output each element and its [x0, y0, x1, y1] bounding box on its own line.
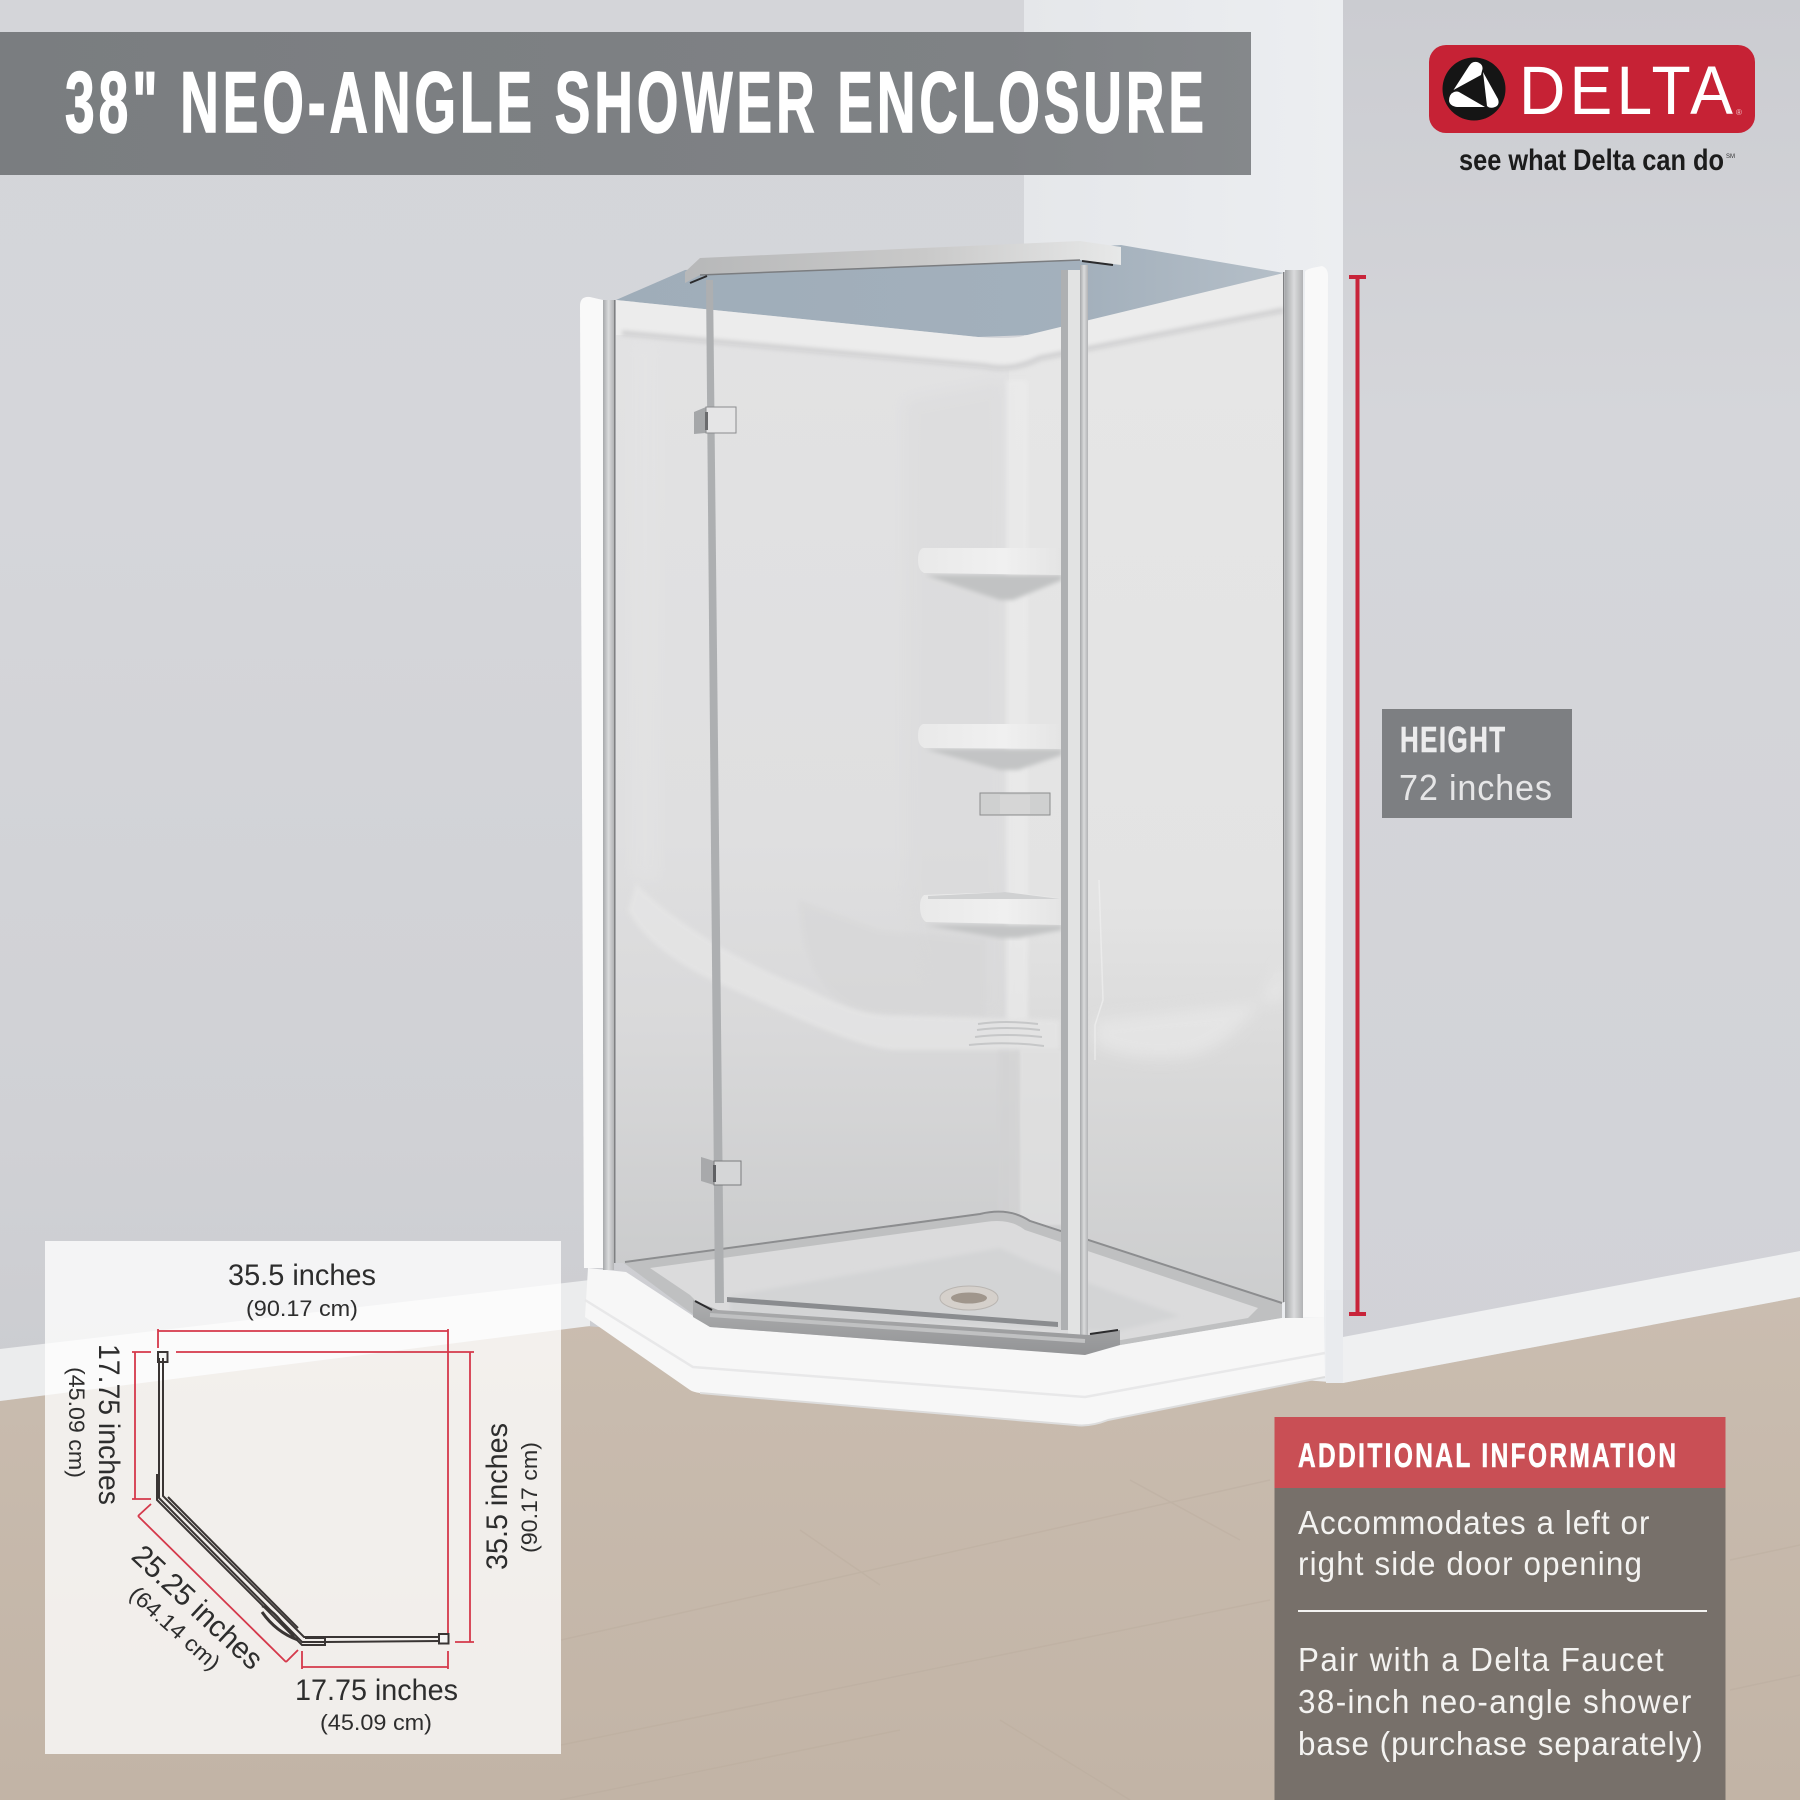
shower tray [624, 1213, 1282, 1345]
dimension label top: (90.17 cm) [246, 1296, 358, 1321]
right white wall flange [1300, 266, 1328, 1317]
text: pairing: base (purchase separately) [1298, 1725, 1703, 1762]
enclosure plan outline [157, 1352, 448, 1645]
height dimension line [1349, 277, 1366, 1314]
dimension label diagonal: 25.25 inches [125, 1539, 269, 1676]
height callout [1382, 709, 1572, 818]
shelf 2 [918, 724, 1062, 770]
top lip of wall [616, 273, 1284, 370]
text: door opening: right side door opening [1298, 1545, 1642, 1582]
text: pairing: Pair with a Delta Faucet [1298, 1641, 1664, 1678]
top header bar [685, 241, 1121, 283]
shelf 3 [920, 892, 1062, 938]
door hinge edge post [706, 280, 724, 1303]
lower door hinge [701, 1157, 741, 1185]
dimension label left: (45.09 cm) [64, 1367, 89, 1478]
right wall track [1283, 270, 1303, 1318]
right wall panel [1009, 305, 1284, 1303]
baseboards [0, 1251, 1800, 1401]
drain [940, 1286, 998, 1310]
shower enclosure [580, 241, 1328, 1425]
back opening: blue-grey ceiling [616, 245, 1284, 337]
panel: additional information [1274, 1417, 1726, 1800]
door bottom sweep [727, 1297, 1058, 1327]
panel: floor plan dimensions [45, 1241, 561, 1754]
heading: ADDITIONAL INFORMATION [1298, 1437, 1676, 1475]
dimension label top: 35.5 inches [228, 1259, 376, 1292]
dimension label left [64, 1344, 125, 1505]
Delta logo: see what Delta can do [1459, 144, 1724, 177]
dimension label left: 17.75 inches [92, 1344, 125, 1505]
threshold bar [693, 1300, 1120, 1355]
dimension label right: (90.17 cm) [517, 1442, 542, 1553]
text: pairing: 38-inch neo-angle shower [1298, 1683, 1692, 1720]
text: door opening: Accommodates a left or [1298, 1504, 1650, 1541]
dimension label right: 35.5 inches [481, 1423, 514, 1570]
height callout: HEIGHT [1400, 720, 1505, 760]
dimension lines [132, 1329, 474, 1669]
dimension label bottom: (45.09 cm) [320, 1710, 432, 1735]
soap dish [980, 793, 1050, 815]
upper door hinge [694, 407, 736, 434]
Delta logo: SM [1726, 154, 1735, 160]
title banner [0, 32, 1251, 175]
dimension label top [228, 1259, 376, 1321]
height callout: 72 inches [1399, 768, 1552, 808]
left wall panel [616, 320, 1009, 1263]
moulded wall contours [628, 340, 1284, 1225]
title banner: 38" NEO-ANGLE SHOWER ENCLOSURE [65, 55, 1204, 151]
text: pairing [1298, 1641, 1703, 1762]
left wall track [603, 300, 616, 1270]
door centre posts [1061, 265, 1088, 1340]
text: door opening [1298, 1504, 1650, 1582]
white base [585, 1268, 1325, 1425]
shelf 1 [918, 548, 1062, 600]
seat ridges [969, 1022, 1044, 1046]
Delta logo [1429, 45, 1755, 177]
icon: delta triangle petals [1449, 62, 1499, 108]
dimension label bottom: 17.75 inches [295, 1674, 458, 1707]
dimension label right [481, 1423, 542, 1570]
Delta logo: ® [1736, 108, 1742, 117]
dimension label diagonal: (64.14 cm) [125, 1581, 225, 1675]
dimension label bottom [295, 1674, 458, 1735]
Delta logo: DELTA [1519, 53, 1733, 130]
left white wall flange [580, 297, 603, 1268]
heading [1274, 1417, 1726, 1488]
